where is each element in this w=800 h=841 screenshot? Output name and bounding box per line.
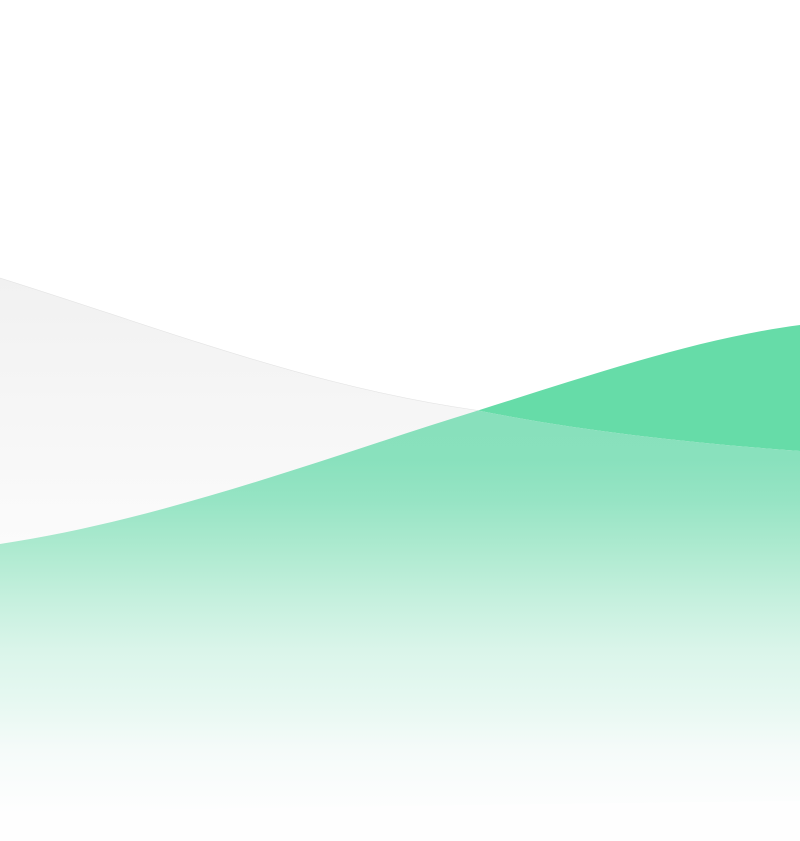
green wave: solid upper part: [478, 325, 800, 451]
faint bottom wave edge: [0, 801, 800, 841]
gray wave: [0, 278, 800, 560]
green wave: fading lower part: [0, 410, 800, 841]
